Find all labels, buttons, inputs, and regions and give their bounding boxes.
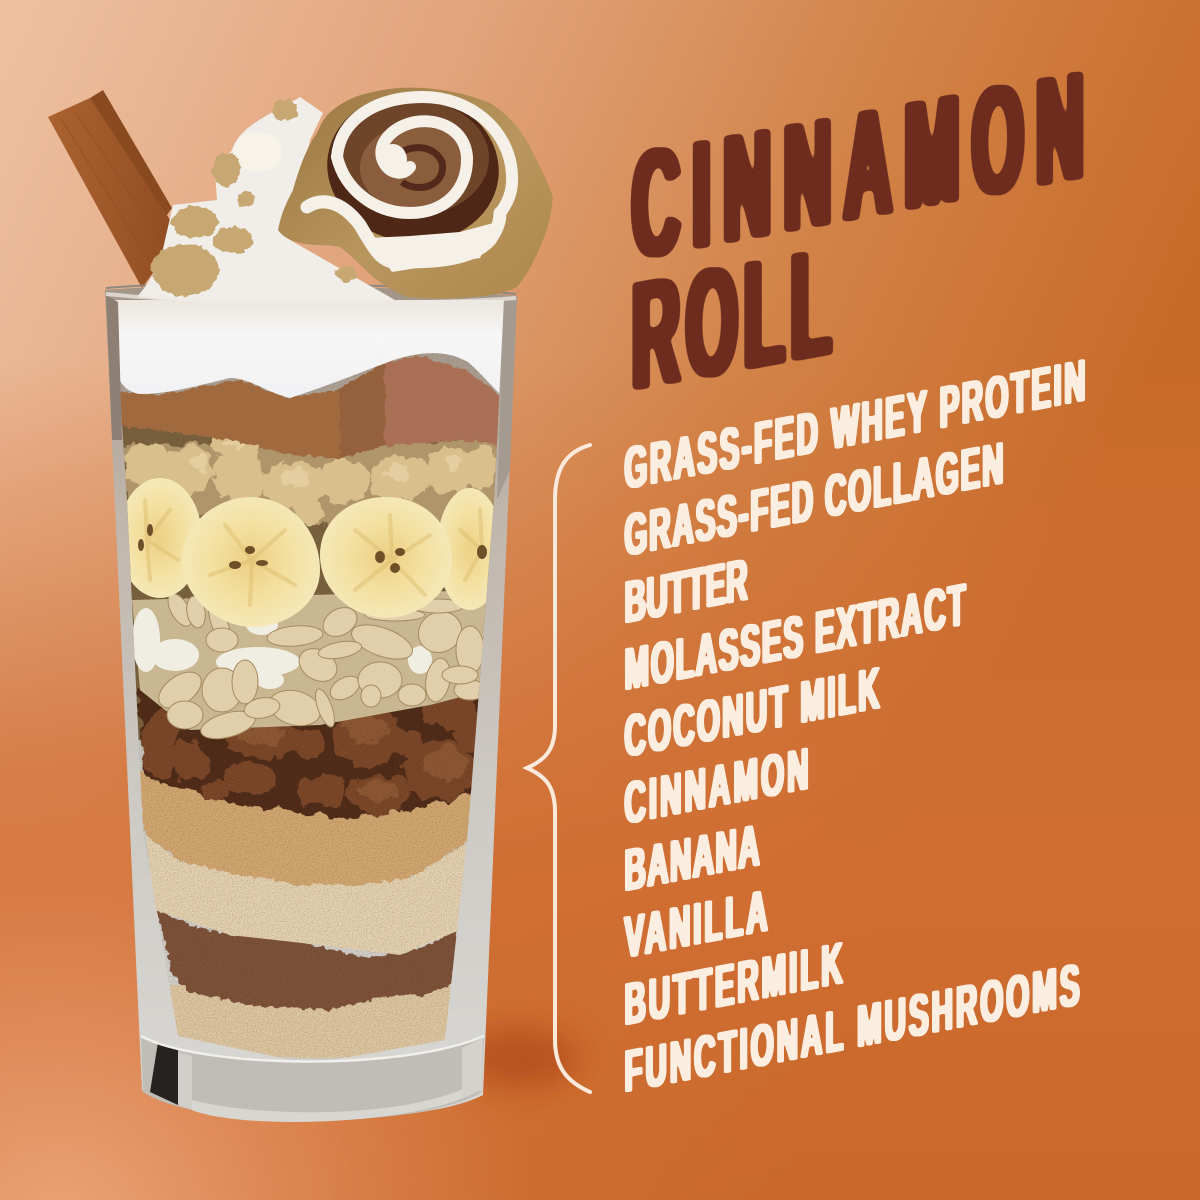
ingredient list: BUTTERMILK xyxy=(624,930,843,1038)
ingredient list: GRASS-FED WHEY PROTEIN xyxy=(624,347,1086,502)
glass base xyxy=(141,1036,484,1122)
powder grain texture xyxy=(100,770,520,1070)
layer: granola clusters xyxy=(124,438,497,526)
curly brace xyxy=(527,445,590,1092)
cinnamon stick garnish xyxy=(48,90,180,288)
front rim highlight xyxy=(106,294,516,303)
ingredient list: VANILLA xyxy=(624,877,768,971)
layer: bottom cream powder xyxy=(150,985,450,1058)
layer: brown crumble xyxy=(138,690,486,818)
title xyxy=(632,39,1084,424)
cinnamon roll xyxy=(278,83,553,298)
ingredient list: FUNCTIONAL MUSHROOMS xyxy=(624,951,1079,1105)
ingredient list: CINNAMON xyxy=(624,736,808,837)
glass body xyxy=(105,286,517,1119)
glass rim and reflections xyxy=(106,284,517,500)
ingredient list: BANANA xyxy=(624,812,760,904)
ingredient list: MOLASSES EXTRACT xyxy=(624,571,966,703)
granola clumps on the cream xyxy=(151,99,357,296)
ingredient list xyxy=(624,347,1086,1105)
ingredient list: COCONUT MILK xyxy=(624,655,880,770)
ingredient list: GRASS-FED COLLAGEN xyxy=(624,430,1004,569)
whipped cream topping xyxy=(137,97,395,304)
layer: rolled oats xyxy=(132,590,490,744)
layer: cocoa powder xyxy=(157,910,458,1010)
dark backing behind the chunky layers xyxy=(110,420,510,740)
title: CINNAMON xyxy=(632,39,1084,294)
ingredient list: BUTTER xyxy=(624,546,748,636)
layer: banana slices xyxy=(118,478,503,627)
layer: peanut tan powder xyxy=(135,770,480,885)
layered contents xyxy=(100,300,520,1070)
layer: light cream powder xyxy=(146,835,472,955)
icing spiral xyxy=(307,97,512,272)
title: ROLL xyxy=(632,215,831,424)
layer: cinnamon powder xyxy=(116,356,506,458)
banana fibres and seeds xyxy=(145,500,482,605)
layer: whipped cream xyxy=(110,300,508,402)
